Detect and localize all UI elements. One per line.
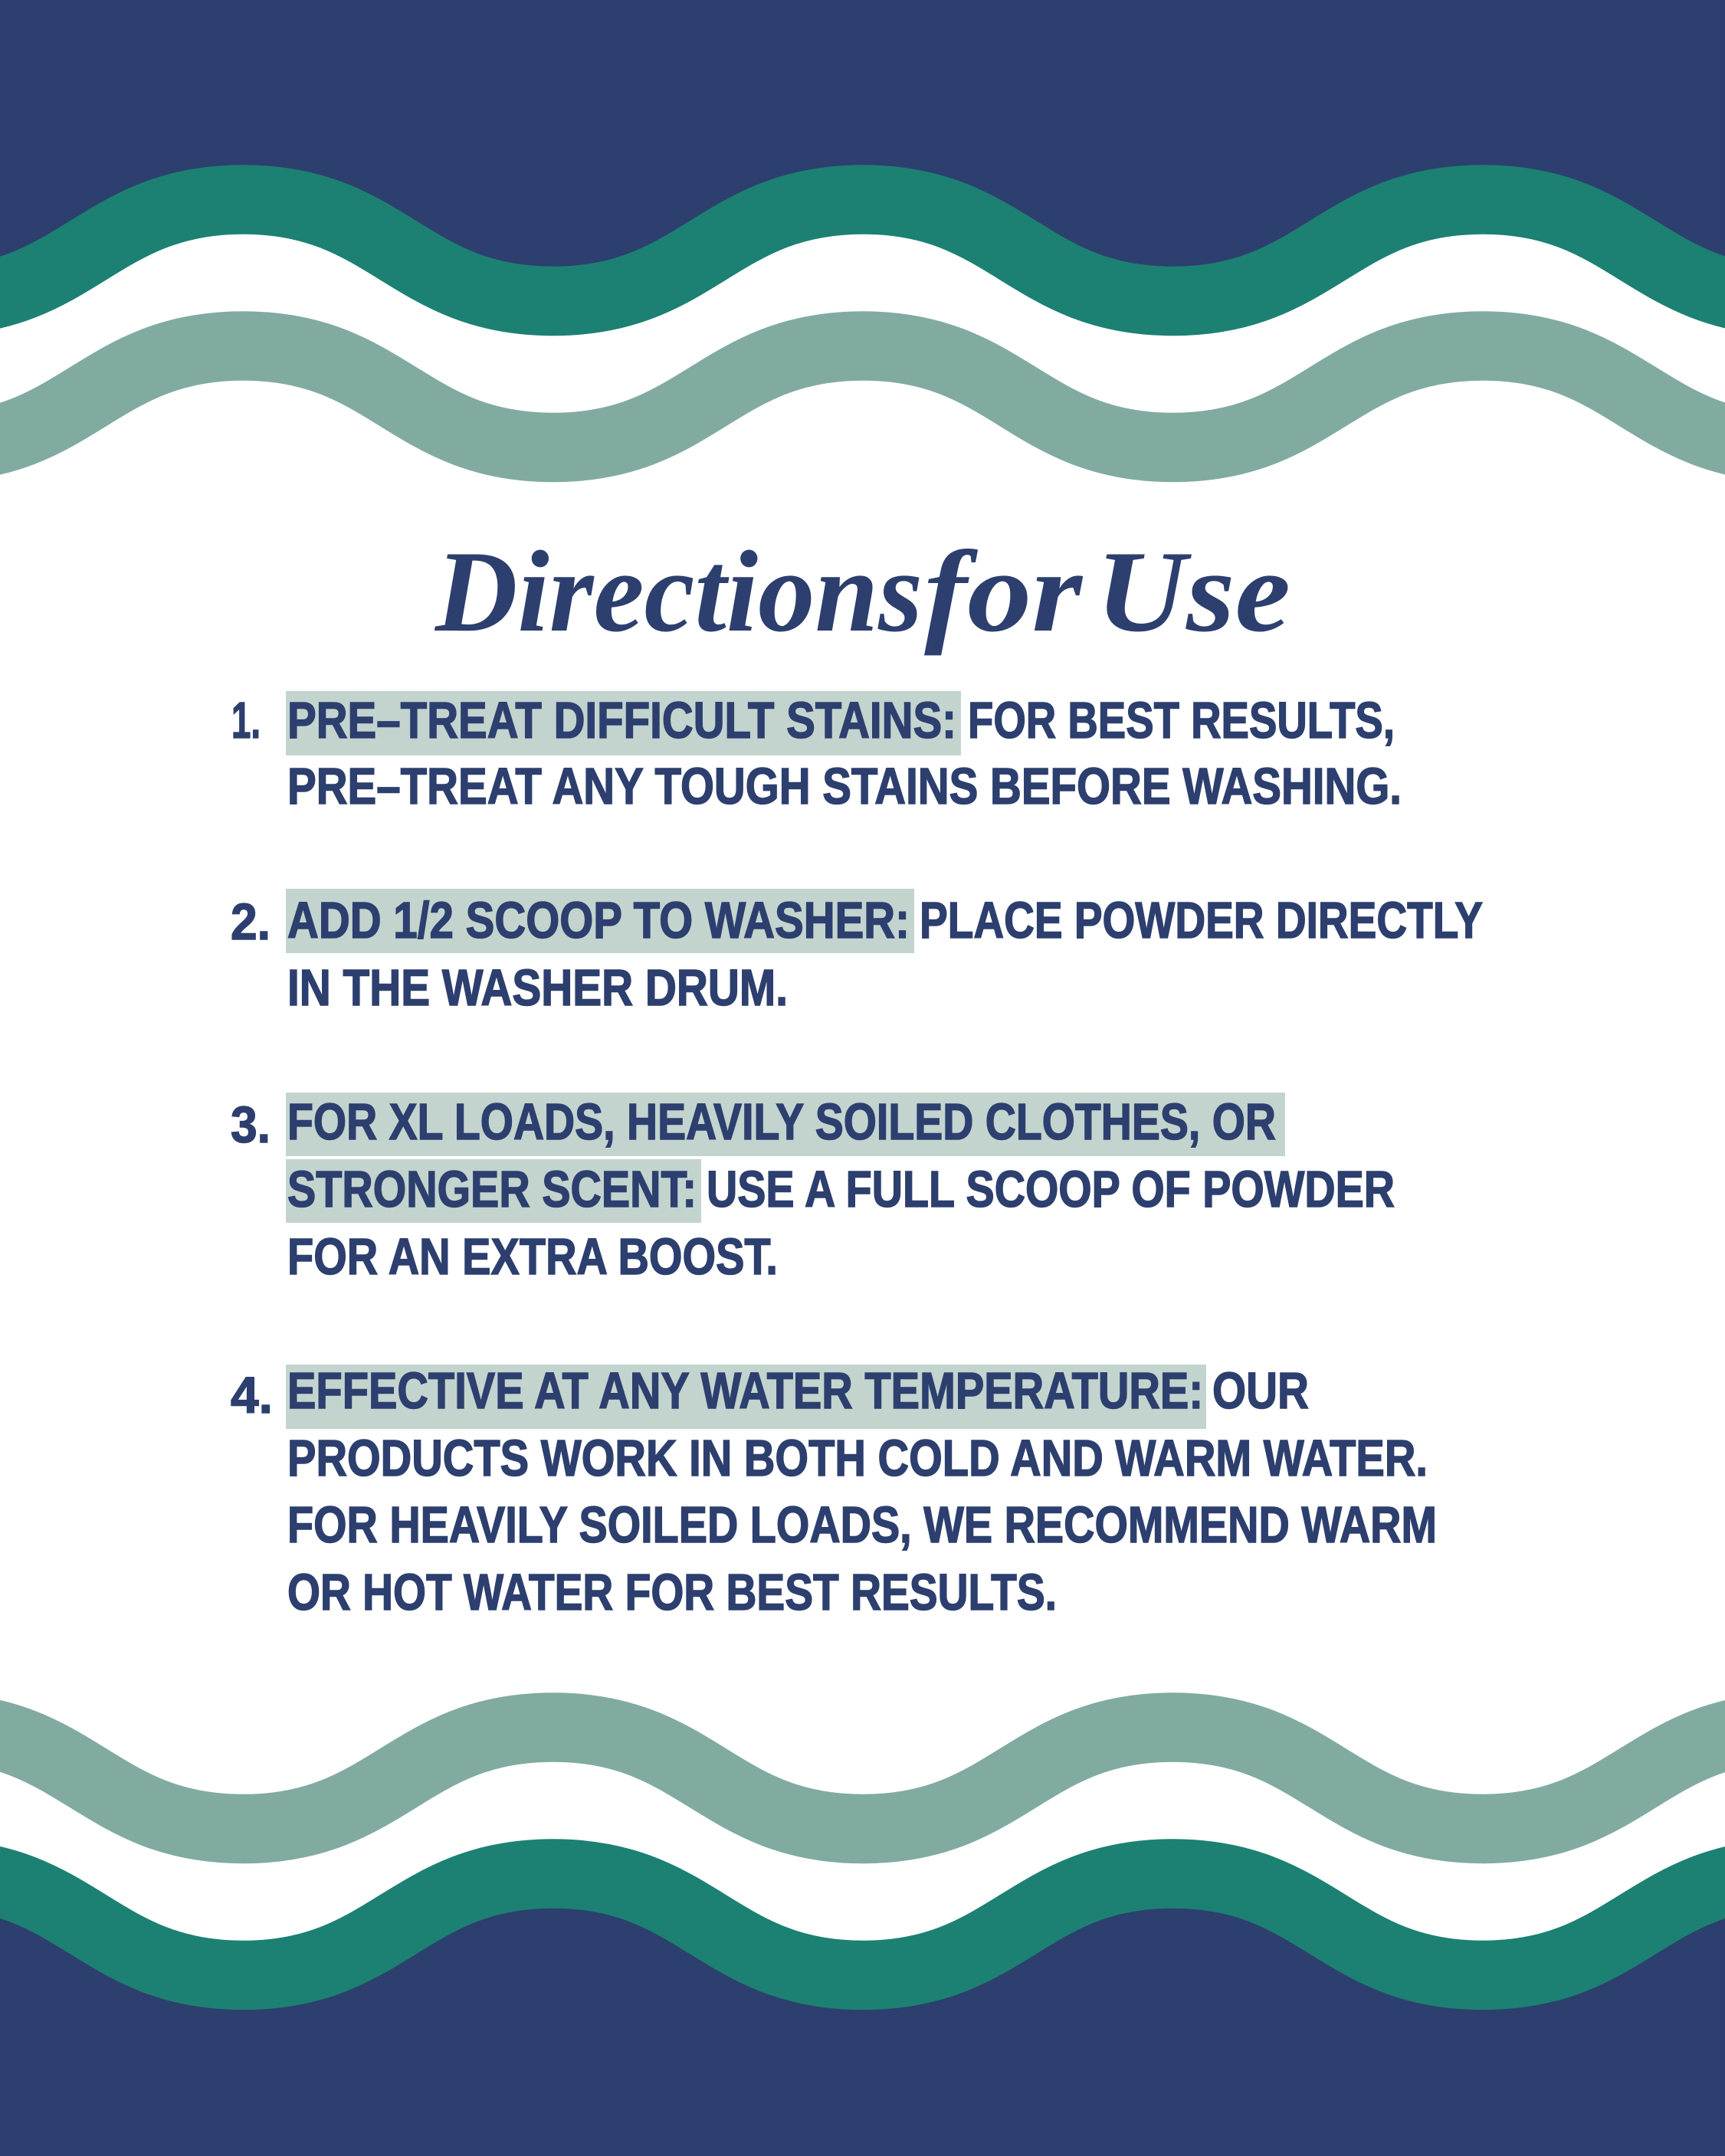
title: for: [924, 527, 1084, 656]
step 4 highlighted text: EFFECTIVE AT ANY WATER TEMPERATURE:: [287, 1362, 1203, 1420]
title: Use: [1096, 527, 1290, 656]
step 2 highlighted text: ADD 1/2 SCOOP TO WASHER:: [287, 892, 910, 949]
step 2 body text: [287, 892, 1483, 1017]
bottom navy wave background: [0, 1874, 1725, 2156]
step 4 body text: FOR HEAVILY SOILED LOADS, WE RECOMMEND WARM: [287, 1496, 1437, 1554]
step 3: [231, 1093, 1395, 1286]
bottom light green wave band: [0, 1727, 1725, 1829]
step 1 body text: PRE–TREAT ANY TOUGH STAINS BEFORE WASHING.: [287, 758, 1402, 815]
bottom green wave band: [0, 1874, 1725, 1975]
step 4: [231, 1362, 1437, 1621]
step 1 body text: FOR BEST RESULTS,: [968, 692, 1395, 749]
step 1 highlight: [286, 691, 961, 755]
step 3 highlight: [286, 1093, 1285, 1223]
top green wave band: [0, 199, 1725, 301]
step 1 number: 1.: [231, 692, 261, 749]
title: Directions: [434, 527, 923, 656]
step 4 body text: PRODUCTS WORK IN BOTH COLD AND WARM WATER.: [287, 1430, 1428, 1487]
step 3 body text: USE A FULL SCOOP OF POWDER: [707, 1161, 1395, 1218]
step 2 body text: PLACE POWDER DIRECTLY: [920, 892, 1483, 949]
step 2 number: 2.: [231, 893, 271, 951]
step 2: [231, 889, 1483, 1017]
step 2 body text: IN THE WASHER DRUM.: [287, 959, 788, 1017]
step 1 highlighted text: PRE–TREAT DIFFICULT STAINS:: [287, 692, 956, 749]
step 3 body text: FOR AN EXTRA BOOST.: [287, 1228, 778, 1286]
step 3 body text: [287, 1161, 1395, 1286]
step 3 number: 3.: [231, 1096, 271, 1154]
step 3 highlighted text: FOR XL LOADS, HEAVILY SOILED CLOTHES, OR: [287, 1093, 1276, 1151]
step 4 number: 4.: [231, 1367, 273, 1424]
step 3 highlighted text: [287, 1093, 1276, 1218]
title: [434, 527, 1290, 656]
top light green wave band: [0, 346, 1725, 447]
step 4 body text: [287, 1362, 1437, 1621]
step 3 highlighted text: STRONGER SCENT:: [287, 1161, 697, 1218]
step 1: [231, 691, 1402, 815]
step 4 body text: OUR: [1212, 1362, 1309, 1420]
step 2 highlight: [286, 889, 914, 953]
step 4 body text: OR HOT WATER FOR BEST RESULTS.: [287, 1564, 1057, 1621]
top navy wave background: [0, 0, 1725, 301]
step 4 highlight: [286, 1365, 1206, 1429]
step 1 body text: [287, 692, 1402, 815]
